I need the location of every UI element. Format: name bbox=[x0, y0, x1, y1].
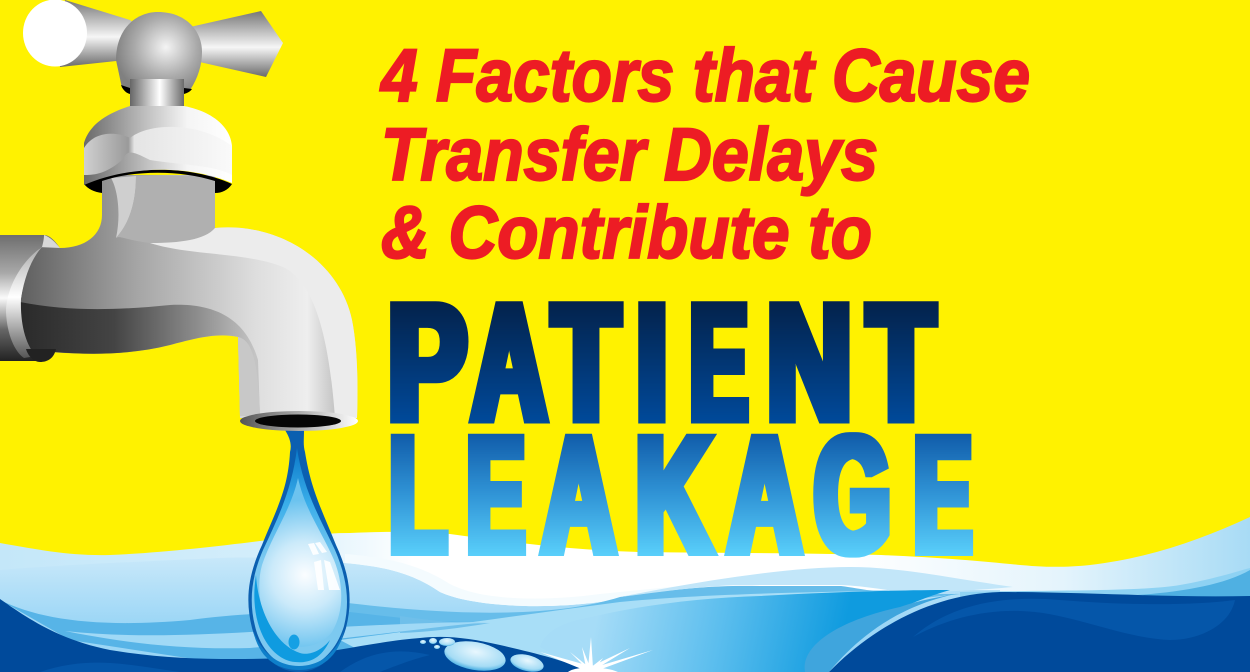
headline: PATIENT: N bbox=[767, 270, 852, 456]
wave: lens near deep water bbox=[805, 593, 960, 672]
headline: LEAKAGE: E bbox=[914, 403, 971, 588]
headline: PATIENT: P bbox=[388, 270, 467, 456]
title line 3: & Contribute to bbox=[381, 191, 872, 274]
stem bbox=[130, 79, 184, 106]
faucet bbox=[0, 0, 358, 431]
drop highlights bbox=[308, 542, 340, 590]
title bbox=[379, 34, 1030, 274]
handle right arm bbox=[190, 11, 283, 77]
handle end cap bbox=[23, 0, 87, 66]
mouth opening bbox=[255, 414, 341, 428]
spout top highlight bbox=[150, 227, 357, 418]
water waves bbox=[0, 517, 1250, 672]
supply pipe bbox=[0, 235, 60, 361]
drop inner bubble bbox=[288, 634, 300, 650]
bubbles bbox=[420, 637, 545, 672]
spout mouth bbox=[240, 411, 358, 431]
water drop bbox=[248, 430, 350, 672]
headline: PATIENT: A bbox=[472, 270, 546, 456]
handle left arm bbox=[60, 0, 150, 67]
wave: pale upper right swell bbox=[620, 567, 1013, 597]
wave: pale crest bbox=[0, 517, 1250, 672]
flange crescent bbox=[6, 247, 42, 358]
flange shadow bbox=[26, 349, 56, 362]
headline: PATIENT: T bbox=[553, 270, 619, 456]
neck highlight bbox=[111, 176, 136, 238]
spout underside shadow bbox=[20, 302, 260, 416]
headline: PATIENT: T bbox=[868, 270, 934, 456]
wave: white swoosh bbox=[345, 554, 700, 606]
headline: LEAKAGE: A bbox=[542, 403, 615, 588]
handle ball bbox=[116, 12, 202, 96]
headline: PATIENT: E bbox=[690, 270, 747, 456]
wave: right band bbox=[960, 568, 1250, 600]
drop lower rim bbox=[253, 630, 344, 670]
title line 1: 4 Factors that Cause bbox=[379, 34, 1030, 117]
deep water right ripple bbox=[913, 599, 1235, 640]
headline: PATIENT: I bbox=[636, 270, 667, 456]
collar band bbox=[84, 127, 232, 175]
wave: left medium band bbox=[0, 600, 640, 662]
stem shadow bbox=[121, 85, 192, 94]
wave: centre streak bbox=[400, 616, 490, 633]
collar shadow bbox=[84, 170, 232, 193]
title line 2: Transfer Delays bbox=[381, 113, 878, 196]
sparkle bbox=[540, 637, 653, 672]
neck shade bbox=[116, 176, 215, 243]
spout body bbox=[20, 175, 357, 418]
collar bbox=[84, 106, 232, 185]
deep water right bbox=[829, 592, 1250, 672]
drop lower crescent bbox=[254, 575, 330, 662]
headline: LEAKAGE: K bbox=[636, 403, 712, 588]
wave: light blue body bbox=[0, 557, 1000, 672]
headline: LEAKAGE: L bbox=[390, 403, 446, 588]
headline: LEAKAGE: G bbox=[815, 403, 890, 588]
wave: lower light section bbox=[340, 590, 940, 672]
headline: LEAKAGE: E bbox=[467, 403, 524, 588]
wave: medium band across centre bbox=[340, 586, 960, 630]
wave: bright blue centre bbox=[540, 590, 950, 672]
deep water left ripple bbox=[40, 651, 430, 672]
wave: lighter sliver bbox=[65, 622, 490, 648]
headline: LEAKAGE: A bbox=[728, 403, 801, 588]
flange top lip bbox=[42, 235, 60, 248]
deep water left bbox=[0, 599, 590, 672]
